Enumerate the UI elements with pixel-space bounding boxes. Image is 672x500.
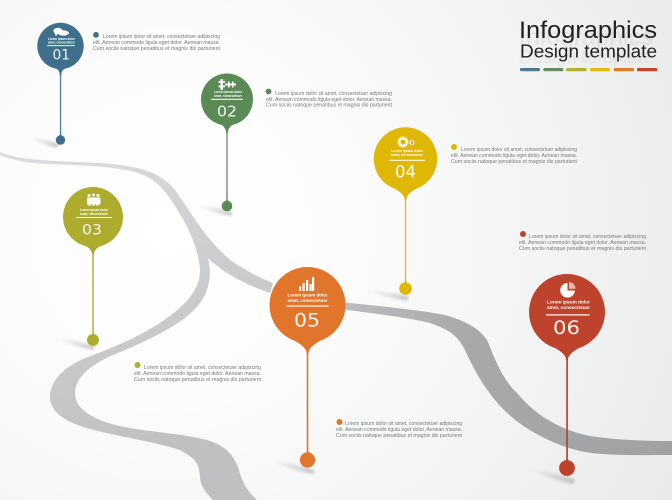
text block 06: Cum sociis natoque penatibus et magnis dis parturient [519,246,646,252]
text block 01: elit. Aenean commodo ligula eget dolor. Aenean massa. [93,40,220,46]
text block 06: elit. Aenean commodo ligula eget dolor. Aenean massa. [519,240,646,246]
icon: speech bubbles [53,28,69,36]
pin 01: 01 [52,47,70,63]
pin 05: 05 [294,310,320,332]
text block 06 [519,231,646,252]
text block 03 [134,362,261,383]
pin 05 [270,267,346,474]
icon: puzzle [218,79,236,90]
text block 02: elit. Aenean commodo ligula eget dolor. Aenean massa. [266,97,392,103]
pin 04: 04 [395,162,416,181]
title: Design template [519,47,653,67]
pin 03: 03 [82,222,102,238]
pin 06: Lorem ipsum dolor [547,300,590,306]
text block 05: Lorem ipsum dolor sit amet, consectetuer adipiscing [345,421,462,427]
pin 02: Lorem ipsum dolor [214,90,243,94]
text block 05: elit. Aenean commodo ligula eget dolor. Aenean massa. [336,427,462,433]
colour legend bars [520,68,657,71]
pin 06: 06 [553,317,580,339]
pin 06: amet, consectetuer [547,305,590,311]
pin 02: 02 [217,103,237,121]
icon: pie chart [560,282,576,298]
text block 03: Cum sociis natoque penatibus et magnis dis parturient [134,377,261,383]
pin 01: Lorem ipsum dolor [48,37,76,41]
text block 04: elit. Aenean commodo ligula eget dolor. Aenean massa. [451,153,577,159]
text block 05: Cum sociis natoque penatibus et magnis dis parturient [336,433,462,439]
text block 04: Cum sociis natoque penatibus et magnis dis parturient [451,159,577,165]
text block 01 [93,32,220,52]
pin 03 [57,187,123,350]
pin 04: amet, consectetuer [391,153,424,157]
title: Infographics [519,24,653,51]
text block 06: Lorem ipsum dolor sit amet, consectetuer adipiscing [529,234,646,240]
pin 02 [197,74,253,216]
pin 03: Lorem ipsum dolor [80,208,109,212]
text block 04 [451,144,577,165]
text block 03: Lorem ipsum dolor sit amet, consectetuer adipiscing [144,365,261,371]
pin 02: amet, consectetuer [214,94,243,98]
pin 04 [368,127,437,301]
text block 01: Lorem ipsum dolor sit amet, consectetuer adipiscing [103,34,220,40]
title: Infographics [519,17,657,44]
icon: gears [398,137,414,147]
text block 01: Cum sociis natoque penatibus et magnis dis parturient [93,46,220,52]
pin 01 [27,23,84,148]
pin 05: amet, consectetuer [288,298,328,303]
text block 04: Lorem ipsum dolor sit amet, consectetuer adipiscing [461,147,577,153]
text block 02 [266,89,392,109]
icon: people [87,194,100,206]
text block 03: elit. Aenean commodo ligula eget dolor. Aenean massa. [134,371,261,377]
icon: bar chart [299,277,314,291]
road: winding left branch [0,152,273,500]
road: right branch [340,302,672,455]
text block 02: Cum sociis natoque penatibus et magnis dis parturient [266,103,392,109]
text block 05 [336,419,462,439]
pin 04: Lorem ipsum dolor [391,149,424,153]
pin 03: amet, consectetuer [80,212,109,216]
pin 05: Lorem ipsum dolor [288,292,328,298]
pin 01: amet, consectetuer [48,41,76,45]
pin 06 [527,274,605,484]
title [519,17,657,67]
text block 02: Lorem ipsum dolor sit amet, consectetuer adipiscing [275,91,392,97]
title: Design template [520,42,657,62]
